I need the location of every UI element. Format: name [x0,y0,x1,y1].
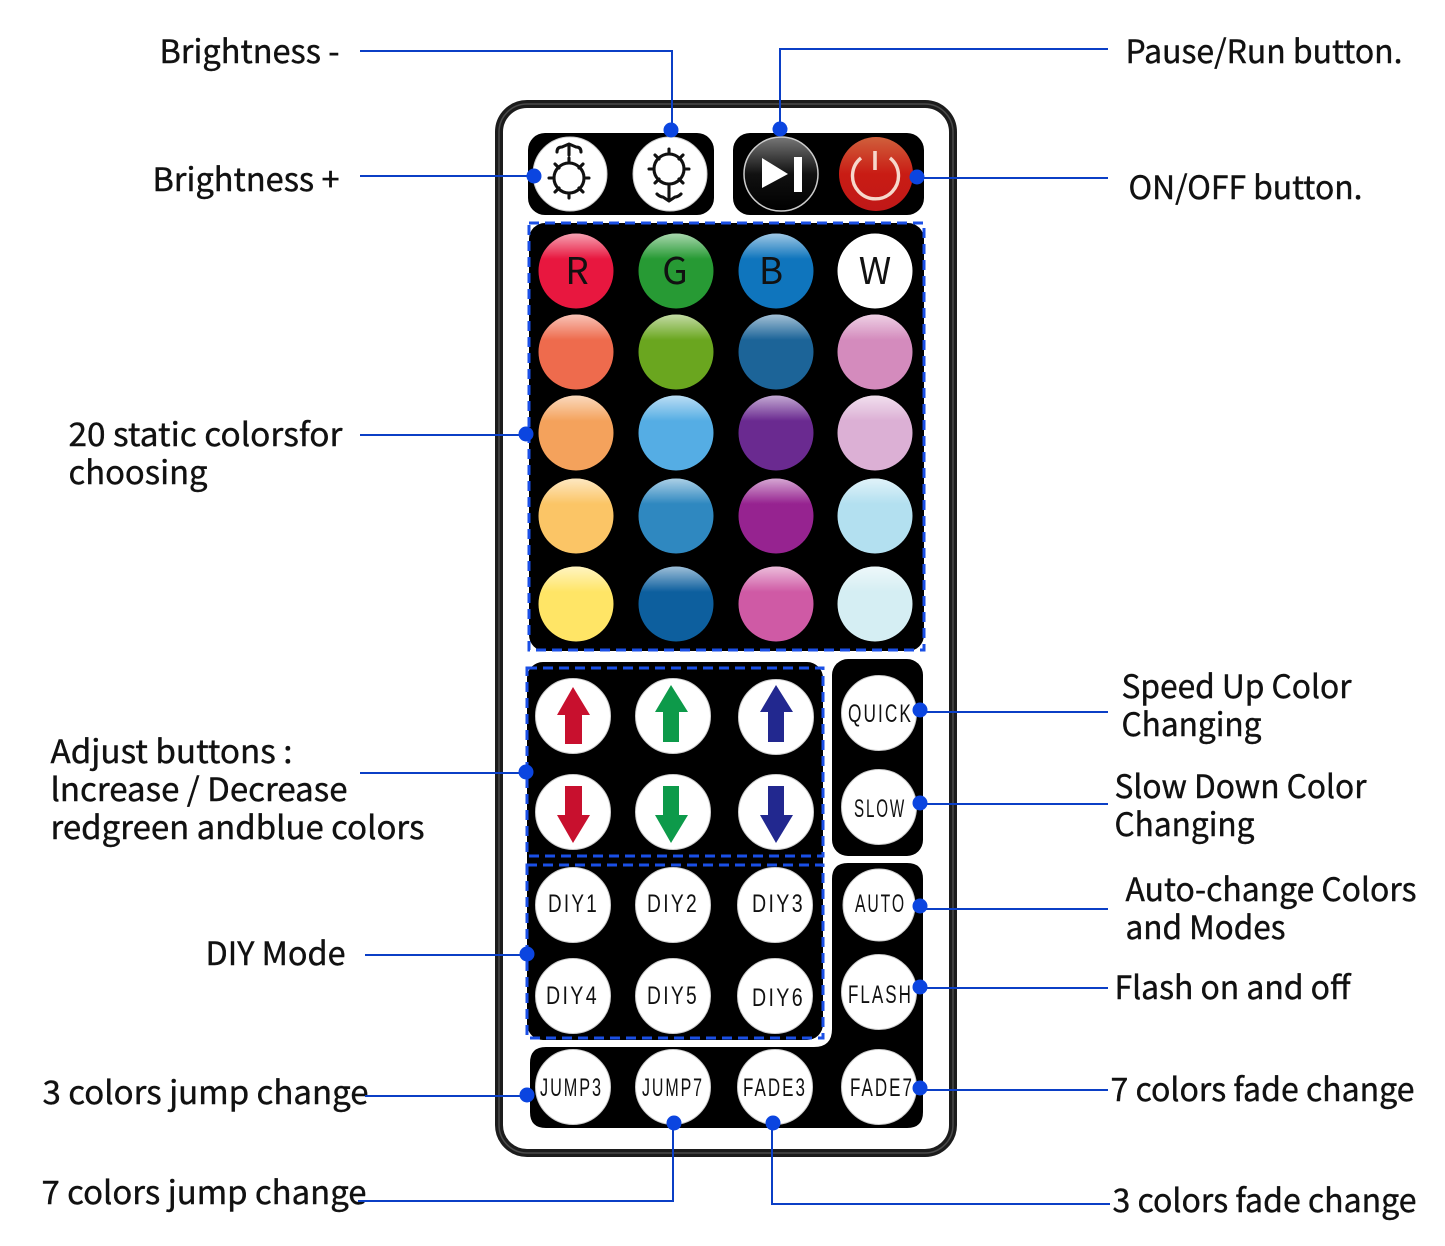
button DIY4 [536,958,610,1034]
panel: DIY buttons [536,868,812,1034]
panel: speed buttons [832,659,923,856]
callout: 3 colors jump change [42,1068,534,1114]
callout: Pause/Run button [772,27,1402,136]
dashed box: DIY [527,865,823,1038]
button R [538,234,614,308]
callout: Slow Down Color Changing: Slow Down Color [1114,762,1367,808]
callout: Brightness -: Brightness - [160,27,340,73]
button DIY2: DIY2 [647,890,699,918]
button B: B [759,241,783,295]
callout: ON/OFF button: ON/OFF button. [1128,163,1362,209]
callout: Speed Up Color Changing: Changing [1122,700,1262,746]
arrow button: green down [636,774,710,850]
panel: 20 static colours [529,223,924,651]
arrow button: green up [636,678,710,754]
button DIY3: DIY3 [752,890,805,918]
panel: adjust arrows [536,678,814,850]
arrow button: blue down [738,774,814,850]
button B [738,234,814,308]
callout: Speed Up Color Changing: Speed Up Color [1122,662,1352,708]
button AUTO: AUTO [855,890,906,918]
colour buttons row 3 [538,396,912,470]
button DIY4: DIY4 [546,982,599,1010]
callout: 3 colors fade change [766,1116,1416,1222]
callout: 7 colors fade change: 7 colors fade change [1110,1065,1414,1111]
panel: brightness buttons [528,133,714,215]
callout: Brightness + [152,155,542,201]
callout: Flash on and off: Flash on and off [1114,963,1352,1009]
button JUMP7 [636,1050,710,1124]
button DIY5 [636,958,710,1034]
callout: 7 colors jump change [42,1116,682,1214]
callout: 3 colors fade change: 3 colors fade change [1112,1176,1416,1222]
button AUTO [843,869,915,941]
callout: Brightness +: Brightness + [152,155,340,201]
remote body [499,104,953,1153]
icon: pause/run [744,137,818,211]
arrow button: red up [536,678,610,754]
callout: 7 colors jump change: 7 colors jump change [42,1168,366,1214]
dashed box: adjust [527,668,823,856]
colour buttons row 4 [538,478,912,554]
callout: Adjust buttons: redgreen andblue colors [50,803,424,849]
callout: 20 static colors: choosing [68,448,208,494]
button G: G [662,241,688,295]
button QUICK [842,676,916,750]
icon: power [839,137,913,211]
button FADE3 [738,1050,812,1124]
button FADE3: FADE3 [743,1074,807,1102]
button FLASH [842,954,916,1030]
callout: Adjust buttons [50,727,534,849]
callout: Auto-change Colors and Modes: and Modes [1126,903,1286,949]
icon: brightness minus [633,137,707,211]
button W [838,234,912,308]
button R: R [565,241,589,295]
dashed box: static colours [529,223,924,650]
button FADE7: FADE7 [850,1074,914,1102]
callout: 20 static colors: 20 static colorsfor [68,410,343,456]
callout: DIY Mode [206,929,534,975]
button DIY3 [738,868,812,942]
arrow button: red down [536,774,610,850]
button JUMP3: JUMP3 [540,1074,603,1102]
callout: DIY Mode: DIY Mode [206,929,346,975]
button DIY1: DIY1 [548,890,599,918]
panel: adjust and DIY block [527,662,823,1040]
callout: Slow Down Color Changing: Changing [1114,800,1254,846]
icon: brightness plus [533,137,607,211]
panel: auto, flash and jump/fade buttons [530,863,923,1128]
callout: Auto-change Colors and Modes: Auto-change Colors [1126,865,1416,911]
button DIY1 [536,868,610,942]
button QUICK: QUICK [848,700,913,728]
callout: Slow Down Color Changing [912,762,1367,846]
callout: ON/OFF button [910,163,1362,209]
button JUMP7: JUMP7 [642,1074,704,1102]
colour buttons row 2 [538,314,912,390]
callout: Adjust buttons: lncrease / Decrease [50,765,348,811]
button SLOW: SLOW [854,795,906,823]
callout: 3 colors jump change: 3 colors jump change [42,1068,368,1114]
callout: 20 static colors [68,410,534,494]
button DIY6 [738,958,812,1034]
button FADE7 [842,1050,916,1124]
callout: 7 colors fade change [912,1065,1414,1111]
callout: Auto-change Colors and Modes [912,865,1416,949]
callout: Brightness - [160,27,678,138]
button DIY2 [636,868,710,942]
callout: Speed Up Color Changing [912,662,1352,746]
button G [638,234,714,308]
colour buttons row 5 [538,566,912,642]
button DIY5: DIY5 [647,982,699,1010]
callout: Adjust buttons: Adjust buttons : [50,727,292,773]
callout: Flash on and off [912,963,1352,1009]
button SLOW [842,770,916,844]
button FLASH: FLASH [848,981,913,1009]
button JUMP3 [536,1050,610,1124]
button W: W [859,241,891,295]
arrow button: blue up [738,680,814,754]
callout: Pause/Run button: Pause/Run button. [1126,27,1402,73]
button DIY6: DIY6 [752,984,805,1012]
panel: pause and power buttons [733,133,924,215]
